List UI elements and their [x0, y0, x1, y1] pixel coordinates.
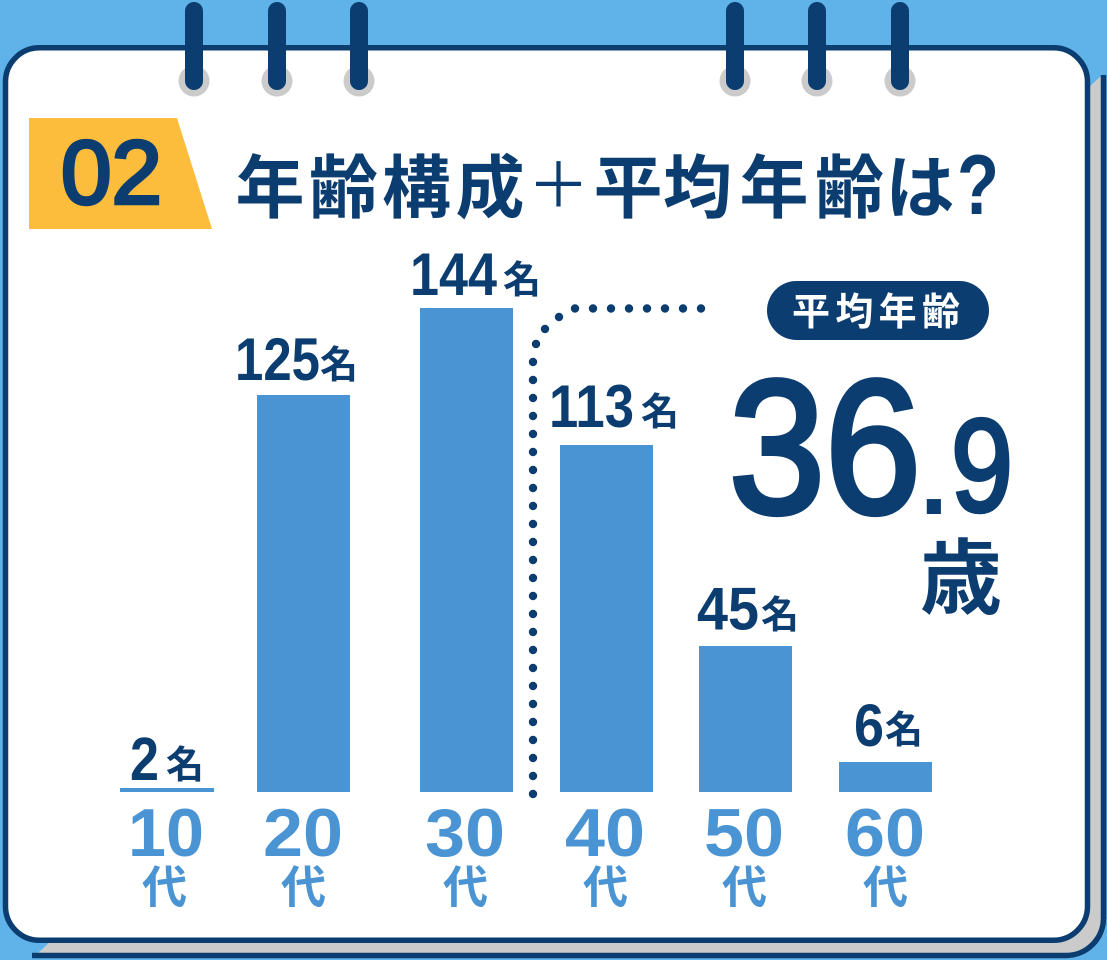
bar: 50代: 45 — [697, 576, 759, 642]
average age value: 歳 — [920, 534, 1002, 625]
bar: 30代 — [410, 241, 541, 913]
bar: 20代: 20 — [263, 795, 343, 871]
icon: binding rings — [178, 2, 916, 96]
title: ? — [957, 138, 999, 233]
bar: 50代: 名 — [761, 595, 799, 637]
number badge — [29, 118, 212, 229]
bar: 30代: 代 — [443, 862, 488, 913]
bar: 20代: 名 — [320, 345, 358, 387]
bar chart — [120, 241, 932, 913]
label pill — [767, 281, 989, 340]
bar: 60代: 名 — [885, 710, 923, 752]
title — [236, 138, 999, 233]
bar: 10代: 代 — [142, 862, 187, 913]
title: 平均年齢は — [594, 150, 954, 227]
label pill: 平均年齢 — [792, 292, 960, 334]
bar: 40代: 代 — [583, 862, 628, 913]
bar: 60代: 60 — [845, 795, 925, 871]
bar: 50代: 50 — [704, 795, 784, 871]
bar: 40代: 名 — [641, 392, 679, 434]
bar: 40代: 40 — [565, 795, 645, 871]
bar: 60代 — [839, 692, 932, 913]
bar: 20代: 代 — [281, 862, 326, 913]
dotted divider — [529, 304, 705, 798]
average age value: . — [920, 424, 948, 536]
average age value — [729, 342, 1013, 625]
title: 年齢構成 — [236, 150, 524, 227]
bar: 30代: 144 — [410, 241, 498, 308]
bar: 40代: 113 — [549, 373, 634, 440]
bar: 60代: 6 — [854, 692, 884, 759]
average age value: 36 — [729, 342, 921, 554]
bar: 60代: 代 — [863, 862, 908, 913]
number badge: 02 — [61, 124, 162, 224]
bar: 10代: 2 — [130, 725, 159, 793]
average age value: 9 — [951, 392, 1013, 539]
callout: average age — [729, 281, 1013, 625]
bar: 30代: 名 — [503, 260, 541, 302]
bar: 40代 — [549, 373, 679, 913]
bar: 10代: 名 — [166, 745, 204, 787]
bar: 50代: 代 — [722, 862, 767, 913]
bar: 30代: 30 — [425, 795, 505, 871]
title: ＋ — [528, 152, 590, 221]
bar: 50代 — [697, 576, 799, 913]
bar: 10代: 10 — [128, 795, 204, 871]
bar: 20代 — [235, 326, 358, 913]
bar: 10代 — [120, 725, 214, 913]
bar: 20代: 125 — [235, 326, 320, 393]
